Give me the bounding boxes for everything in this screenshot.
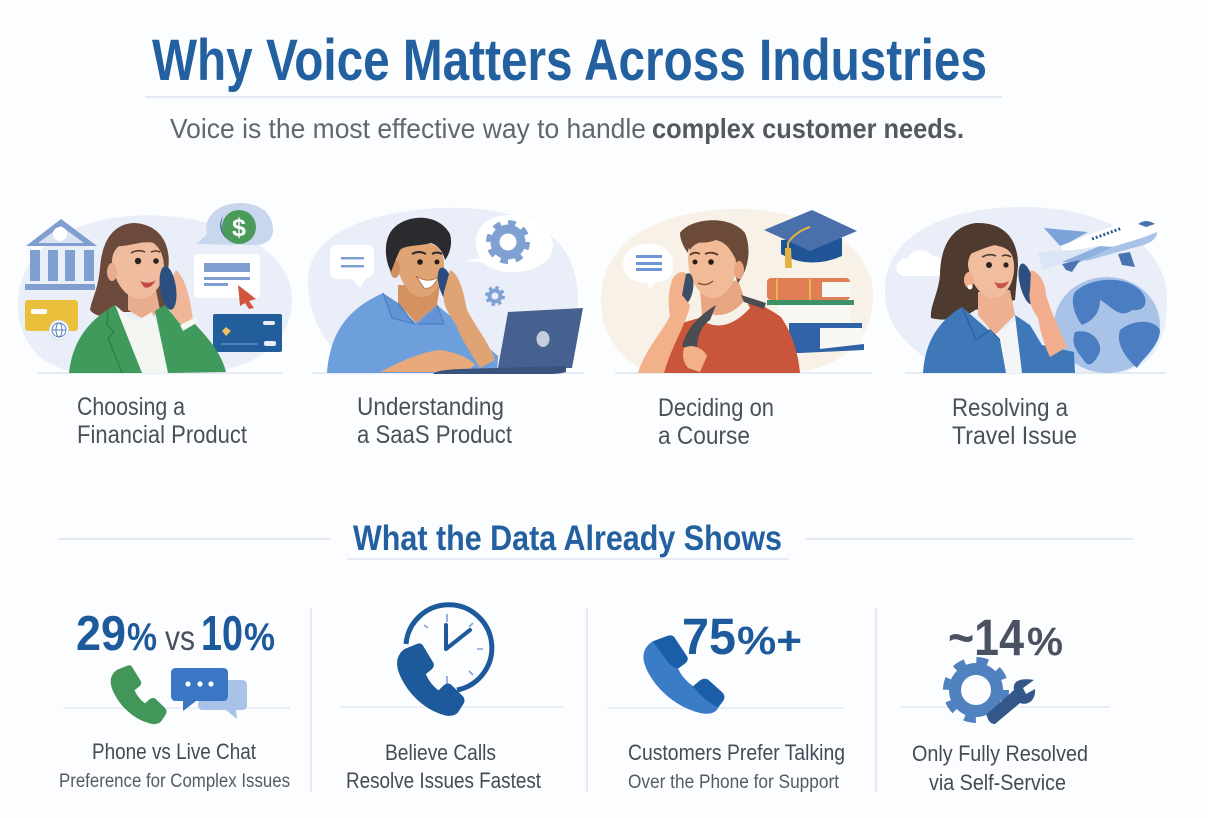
label: resolving a travel issue [952,394,1077,450]
caption: Preference for Complex Issues [59,771,290,792]
number: 29% vs 10%: 29 [76,607,126,661]
stat: prefer talking [628,608,845,793]
label: deciding on a course [658,394,774,450]
number: 29% vs 10%: % [244,616,275,659]
icon: chat bubbles [171,668,247,719]
icon: clock [406,605,492,690]
label: resolving a travel issue: Resolving a [952,394,1068,422]
caption [59,739,290,792]
icon: laptop [433,308,583,374]
icon: chat bubble [330,245,374,288]
label: choosing a financial product: Financial Product [77,421,247,449]
icon: phone [643,635,724,714]
caption: via Self-Service [929,770,1066,795]
caption [628,740,845,793]
number: 29% vs 10%: 10 [201,607,243,661]
icon: green phone [111,665,167,724]
caption [346,740,541,793]
icon: phone [397,643,464,716]
number: ~14%: % [1027,620,1063,664]
number: ~14%: ~14 [948,609,1025,666]
caption: Believe Calls [385,740,496,765]
icon: blue card [213,314,282,352]
icon: cloud [896,250,944,276]
icon: small gear [486,288,504,304]
number: 29% vs 10%: % [127,616,157,659]
subtitle: Voice is the most effective way to handle [170,113,646,144]
icon: wrench [987,679,1035,724]
caption: Only Fully Resolved [912,741,1088,766]
number: 29% vs 10%: vs [165,619,195,658]
person: young man in red shirt [638,220,800,373]
number: 75%+ [682,608,802,665]
subtitle: complex customer needs. [652,113,964,144]
stat: calls resolve fastest [346,605,541,793]
panel: choosing a financial product [18,203,292,373]
label: deciding on a course: a Course [658,422,750,450]
icon: money speech bubble [197,203,273,245]
number: 75%+: 75 [682,608,736,665]
icon: chat bubble [623,244,673,289]
subtitle [170,113,964,144]
person: woman in blue jacket [923,223,1075,373]
stat: self-service [912,609,1088,795]
section heading: What the Data Already Shows [353,519,782,558]
icon: web form with cursor [194,254,260,309]
background blob [885,207,1167,373]
icon: globe [1054,277,1160,373]
background blob [308,208,578,373]
person: man in blue shirt [327,218,498,373]
icon: money speech bubble: $ [232,214,246,242]
label: choosing a financial product: Choosing a [77,393,185,421]
panel: understanding a SaaS product [308,208,584,374]
icon: gear speech bubble [465,215,553,272]
number: 75%+: %+ [737,619,802,663]
number: 29% vs 10% [76,607,275,661]
caption [912,741,1088,795]
icon: graduation cap [764,210,857,268]
person: woman in green jacket [69,223,226,373]
label: resolving a travel issue: Travel Issue [952,422,1077,450]
stat: phone vs live chat [59,607,290,792]
background blob [18,215,292,373]
title: Why Voice Matters Across Industries [152,28,987,93]
label: choosing a financial product [77,393,247,449]
background blob [601,209,873,373]
label: deciding on a course: Deciding on [658,394,774,422]
panel: resolving a travel issue [885,207,1167,373]
label: understanding a SaaS product: a SaaS Product [357,421,512,449]
caption: Customers Prefer Talking [628,740,845,765]
icon: bank [25,219,97,290]
icon: stack of books [767,278,864,353]
panel: deciding on a course [601,209,873,373]
label: understanding a SaaS product [357,393,512,449]
icon: gear [947,661,1005,719]
label: understanding a SaaS product: Understanding [357,393,504,421]
icon: yellow card with globe [25,300,78,340]
caption: Resolve Issues Fastest [346,768,541,793]
icon: airplane [1038,217,1157,272]
caption: Over the Phone for Support [628,772,840,793]
caption: Phone vs Live Chat [92,739,256,764]
